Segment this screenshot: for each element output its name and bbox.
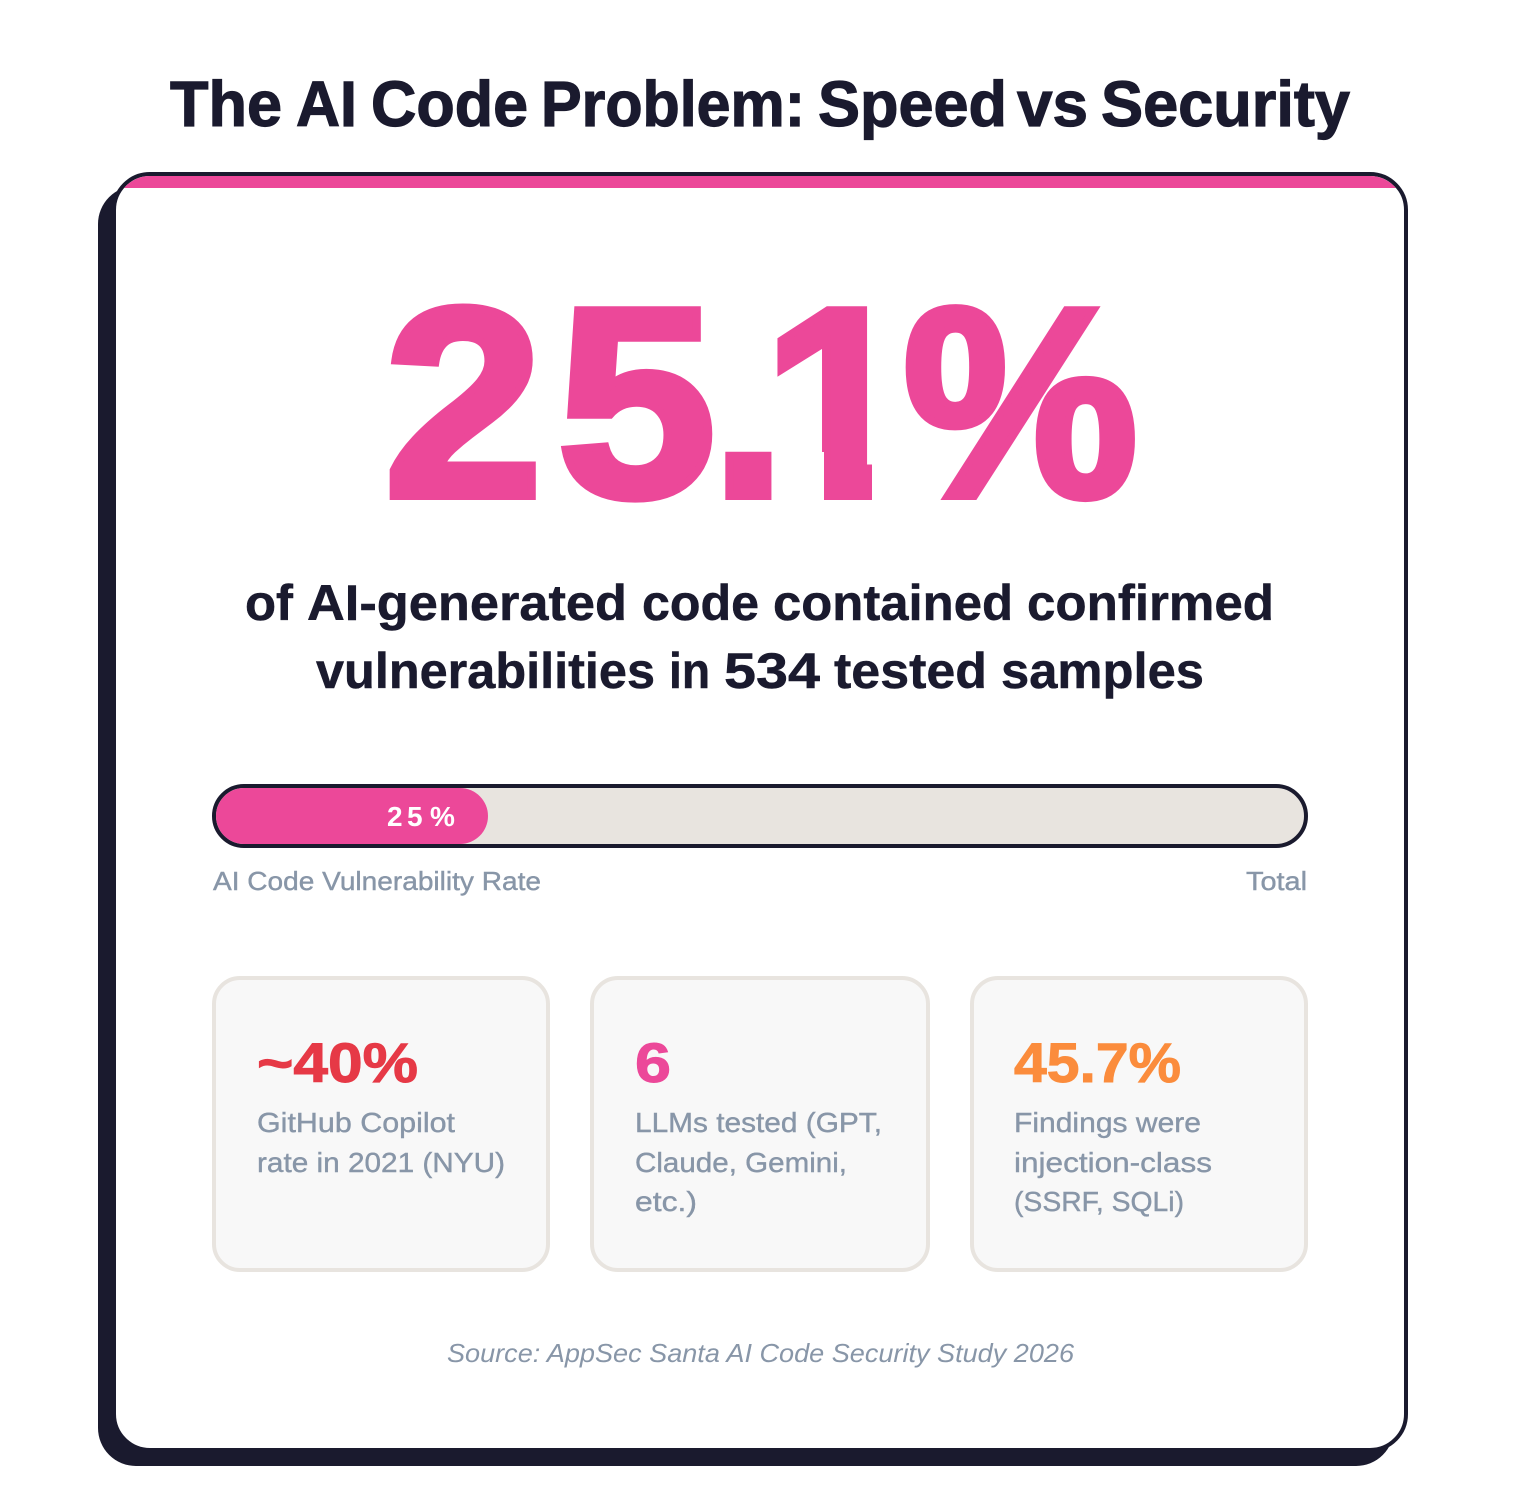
- stat card: LLMs tested: Claude, Gemini,: [635, 1147, 847, 1178]
- subtitle: contained: [773, 575, 1013, 631]
- subtitle: AI-generated: [307, 575, 627, 631]
- big stat number: [384, 253, 1138, 554]
- big stat number: %: [903, 253, 1138, 554]
- progress label left: AI Code Vulnerability Rate: [213, 866, 541, 896]
- stat card: GitHub Copilot: ~40%: [257, 1031, 418, 1094]
- card top accent bar: [116, 176, 1404, 188]
- stat card: injection-class findings: injection-class: [1014, 1147, 1212, 1178]
- big stat number: 1: [763, 253, 913, 554]
- subtitle: in: [669, 643, 710, 699]
- card body: [114, 174, 1406, 1450]
- card shadow: [98, 186, 1394, 1466]
- stat card: GitHub Copilot: rate in 2021 (NYU): [257, 1147, 505, 1178]
- subtitle: code: [642, 575, 759, 631]
- subtitle: tested: [834, 643, 987, 699]
- progress label right: Total: [1246, 866, 1307, 896]
- title: Speed: [818, 68, 1007, 140]
- big stat number: .: [711, 253, 786, 554]
- stat card: LLMs tested: 6: [635, 1031, 671, 1094]
- stat card: LLMs tested: [592, 978, 928, 1270]
- title: vs: [1017, 68, 1088, 140]
- title: AI: [296, 68, 357, 140]
- subtitle: vulnerabilities: [316, 643, 655, 699]
- stat card: injection-class findings: [972, 978, 1306, 1270]
- progress value: 25%: [387, 801, 455, 832]
- stat card: LLMs tested: etc.): [635, 1186, 697, 1217]
- big stat number: 2: [384, 253, 543, 554]
- progress track: [214, 786, 1306, 846]
- big stat number: 5: [557, 253, 716, 554]
- stat card: injection-class findings: Findings were: [1014, 1107, 1201, 1138]
- stat card: LLMs tested: LLMs tested (GPT,: [635, 1107, 882, 1138]
- subtitle: 534: [724, 643, 820, 699]
- title: Security: [1101, 68, 1350, 140]
- stat card: GitHub Copilot: [214, 978, 548, 1270]
- panel: main card: [98, 174, 1406, 1466]
- subtitle: samples: [1001, 643, 1204, 699]
- subtitle: confirmed: [1027, 575, 1274, 631]
- subtitle: of: [245, 575, 293, 631]
- progress fill: [216, 788, 488, 844]
- source note: Source: AppSec Santa AI Code Security Study 2026: [447, 1338, 1075, 1368]
- subtitle: [245, 575, 1274, 699]
- title: Code: [371, 68, 528, 140]
- title: The: [170, 68, 282, 140]
- stat card: injection-class findings: 45.7%: [1014, 1031, 1181, 1094]
- stat card: GitHub Copilot: GitHub Copilot: [257, 1107, 455, 1138]
- stat card: injection-class findings: (SSRF, SQLi): [1014, 1186, 1184, 1217]
- progress bar: [214, 786, 1306, 846]
- title: Problem:: [541, 68, 805, 140]
